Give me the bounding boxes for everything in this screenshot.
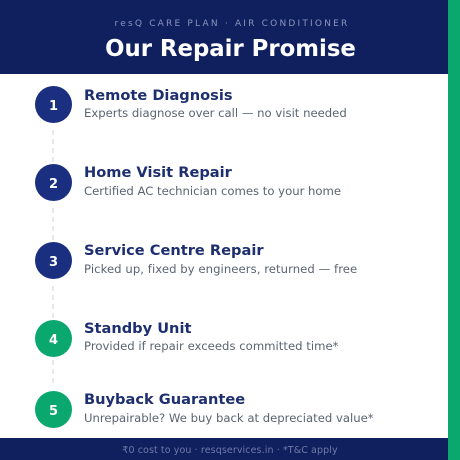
step 1 xyxy=(35,86,347,123)
number badge 2 xyxy=(35,164,72,201)
step 3 heading: Service Centre Repair xyxy=(84,242,264,259)
step 4 description: Provided if repair exceeds committed time* xyxy=(84,339,338,353)
number badge 5 xyxy=(35,391,72,428)
step 3 xyxy=(35,242,357,279)
title: Our Repair Promise xyxy=(105,36,356,62)
step 2 description: Certified AC technician comes to your home xyxy=(84,184,341,198)
step 4 heading: Standby Unit xyxy=(84,320,191,336)
green side bar xyxy=(448,0,460,460)
footer text: ₹0 cost to you · resqservices.in · *T&C apply xyxy=(122,445,338,456)
step 5 heading: Buyback Guarantee xyxy=(84,391,245,408)
step 1 heading: Remote Diagnosis xyxy=(84,87,233,104)
number badge 4 xyxy=(35,320,72,356)
connector lines xyxy=(52,130,54,383)
number badge 1: 1 xyxy=(49,99,58,114)
step 5 description: Unrepairable? We buy back at depreciated value* xyxy=(84,411,374,425)
eyebrow text: resQ CARE PLAN · AIR CONDITIONER xyxy=(115,19,349,29)
step 1 description: Experts diagnose over call — no visit needed xyxy=(84,106,347,120)
step 4 xyxy=(35,320,338,357)
number badge 1 xyxy=(35,86,72,123)
number badge 3: 3 xyxy=(49,255,58,270)
step 2 xyxy=(35,164,341,201)
number badge 4: 4 xyxy=(49,332,58,348)
header band xyxy=(0,0,448,74)
number badge 3 xyxy=(35,242,72,279)
step 3 description: Picked up, fixed by engineers, returned — free xyxy=(84,262,357,276)
step 2 heading: Home Visit Repair xyxy=(84,164,232,181)
number badge 5: 5 xyxy=(49,404,58,419)
number badge 2: 2 xyxy=(49,177,58,192)
step 5 xyxy=(35,391,374,428)
footer band xyxy=(0,438,448,460)
